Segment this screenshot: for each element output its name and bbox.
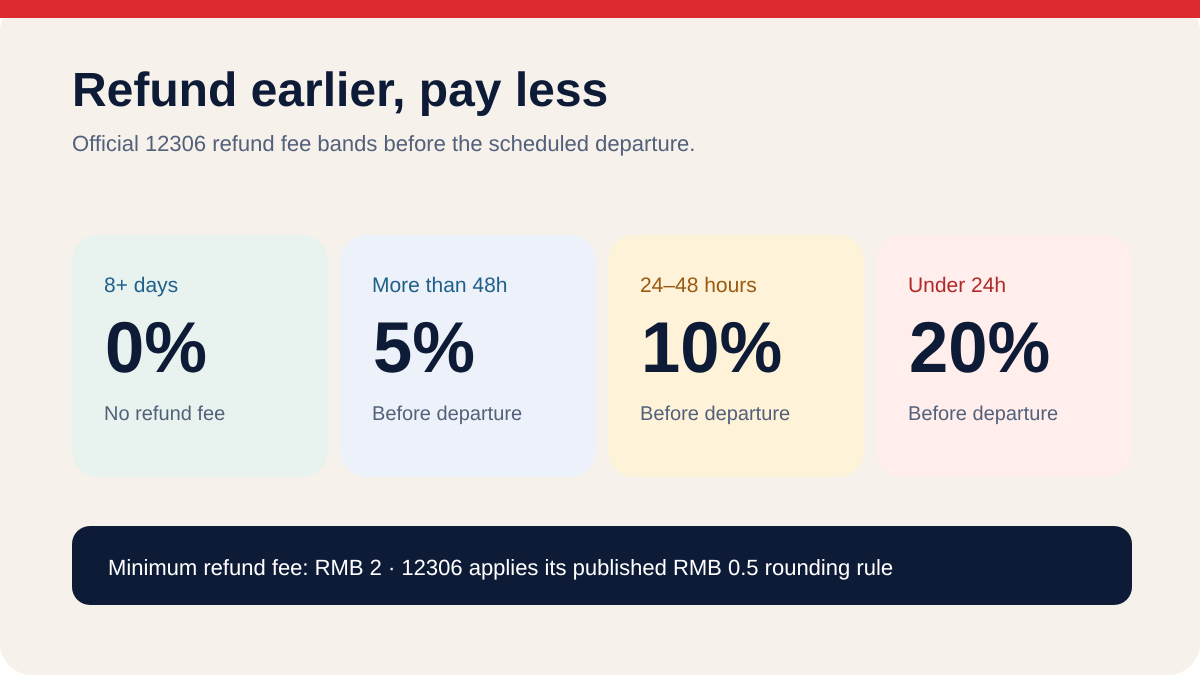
fee percentage: 20% bbox=[909, 308, 1050, 388]
band label: More than 48h bbox=[372, 274, 507, 297]
band label: Under 24h bbox=[908, 274, 1006, 297]
band label: 8+ days bbox=[104, 274, 178, 297]
callout: minimum fee note bbox=[72, 526, 1132, 605]
note: Before departure bbox=[372, 403, 522, 425]
panel: under 24h bbox=[876, 235, 1132, 477]
fee percentage: 5% bbox=[373, 308, 475, 388]
band label: 24–48 hours bbox=[640, 274, 757, 297]
fee percentage: 10% bbox=[641, 308, 782, 388]
panel: 24-48 hours bbox=[608, 235, 864, 477]
subtitle: Official 12306 refund fee bands before the scheduled departure. bbox=[72, 131, 695, 156]
note: No refund fee bbox=[104, 403, 225, 425]
note: Before departure bbox=[640, 403, 790, 425]
title: Refund earlier, pay less bbox=[72, 64, 608, 117]
callout text: Minimum refund fee: RMB 2 · 12306 applies its published RMB 0.5 rounding rule bbox=[108, 555, 893, 580]
top red bar bbox=[0, 0, 1200, 18]
panel: 8+ days bbox=[72, 235, 328, 477]
note: Before departure bbox=[908, 403, 1058, 425]
fee percentage: 0% bbox=[105, 308, 207, 388]
panel: more than 48h bbox=[340, 235, 596, 477]
